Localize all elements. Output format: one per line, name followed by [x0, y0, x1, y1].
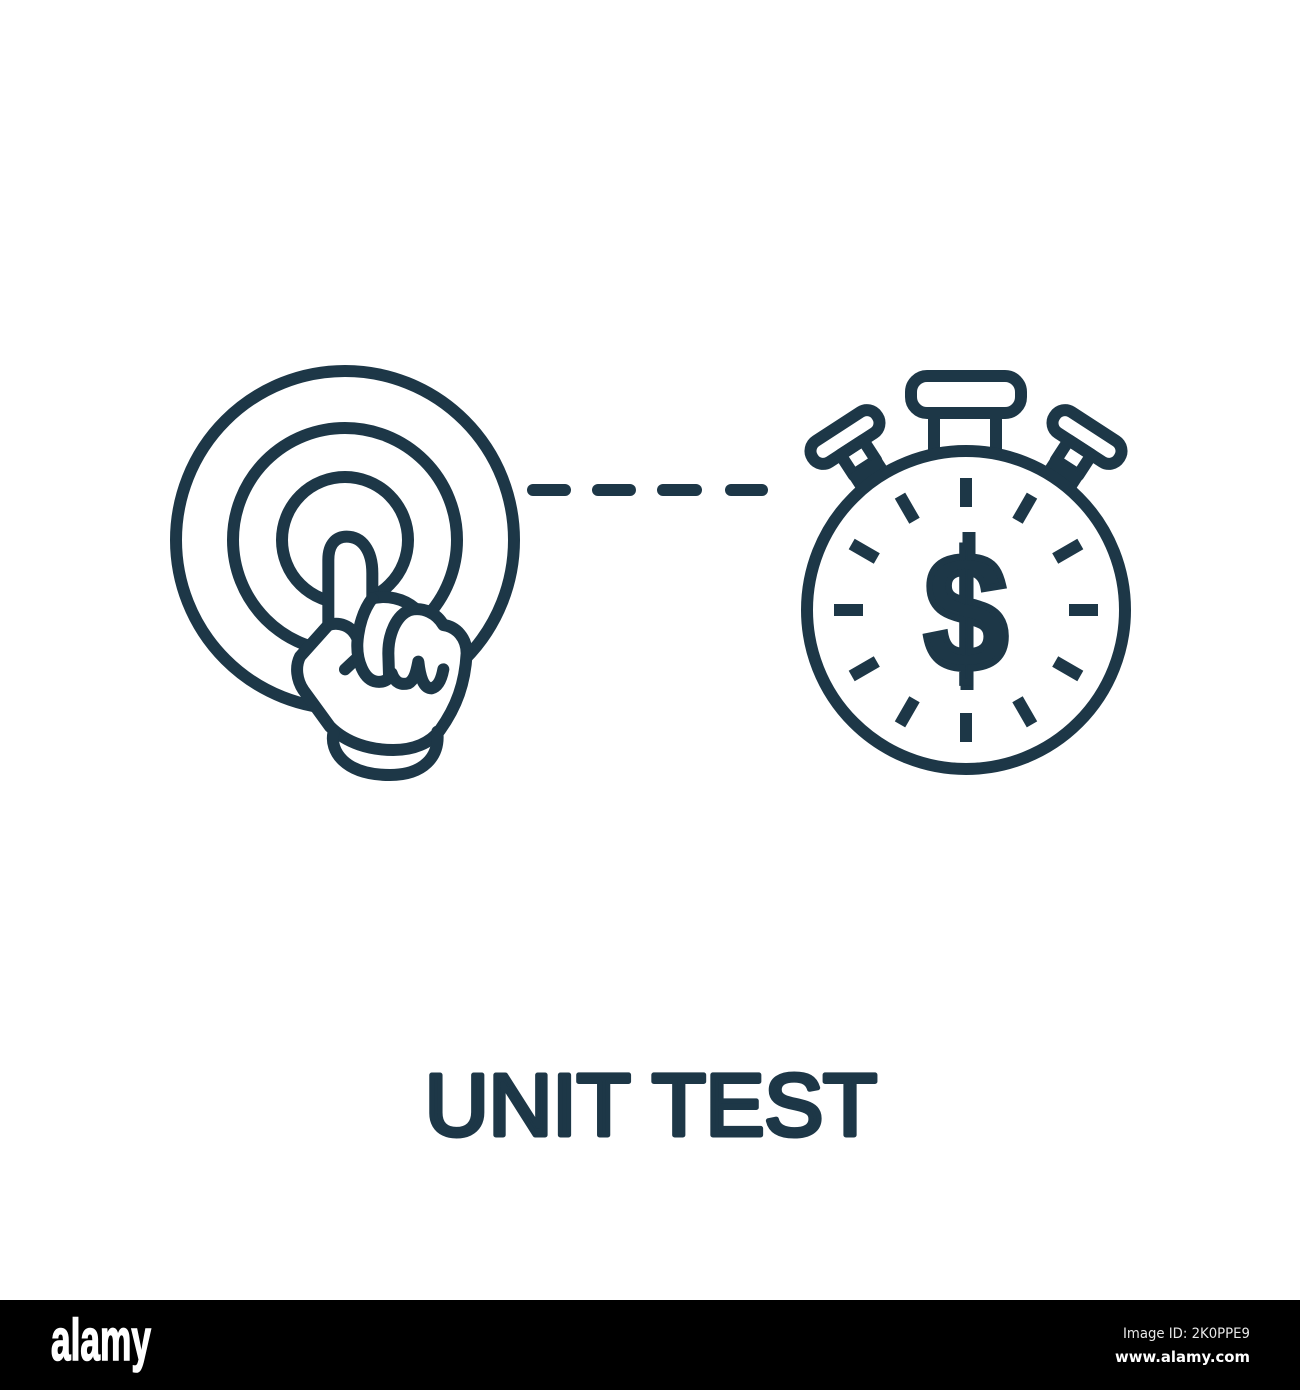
right button	[1023, 406, 1126, 507]
watch face	[807, 451, 1125, 769]
website: www.alamy.com	[1115, 1348, 1250, 1366]
title: UNIT TEST	[425, 1057, 877, 1154]
icon: target with pointing hand	[176, 371, 514, 775]
top button	[911, 376, 1021, 452]
dollar sign: $	[924, 519, 1008, 706]
hour ticks	[834, 478, 1098, 742]
icon: pointing hand	[297, 537, 467, 775]
target rings	[176, 371, 514, 709]
footer bar	[0, 1300, 1300, 1390]
footer logo: alamy	[51, 1308, 151, 1373]
left button	[806, 406, 909, 507]
image id: Image ID: 2K0PPE9	[1123, 1326, 1250, 1342]
dashed connector	[533, 484, 762, 496]
icon: stopwatch with dollar sign	[806, 376, 1126, 769]
